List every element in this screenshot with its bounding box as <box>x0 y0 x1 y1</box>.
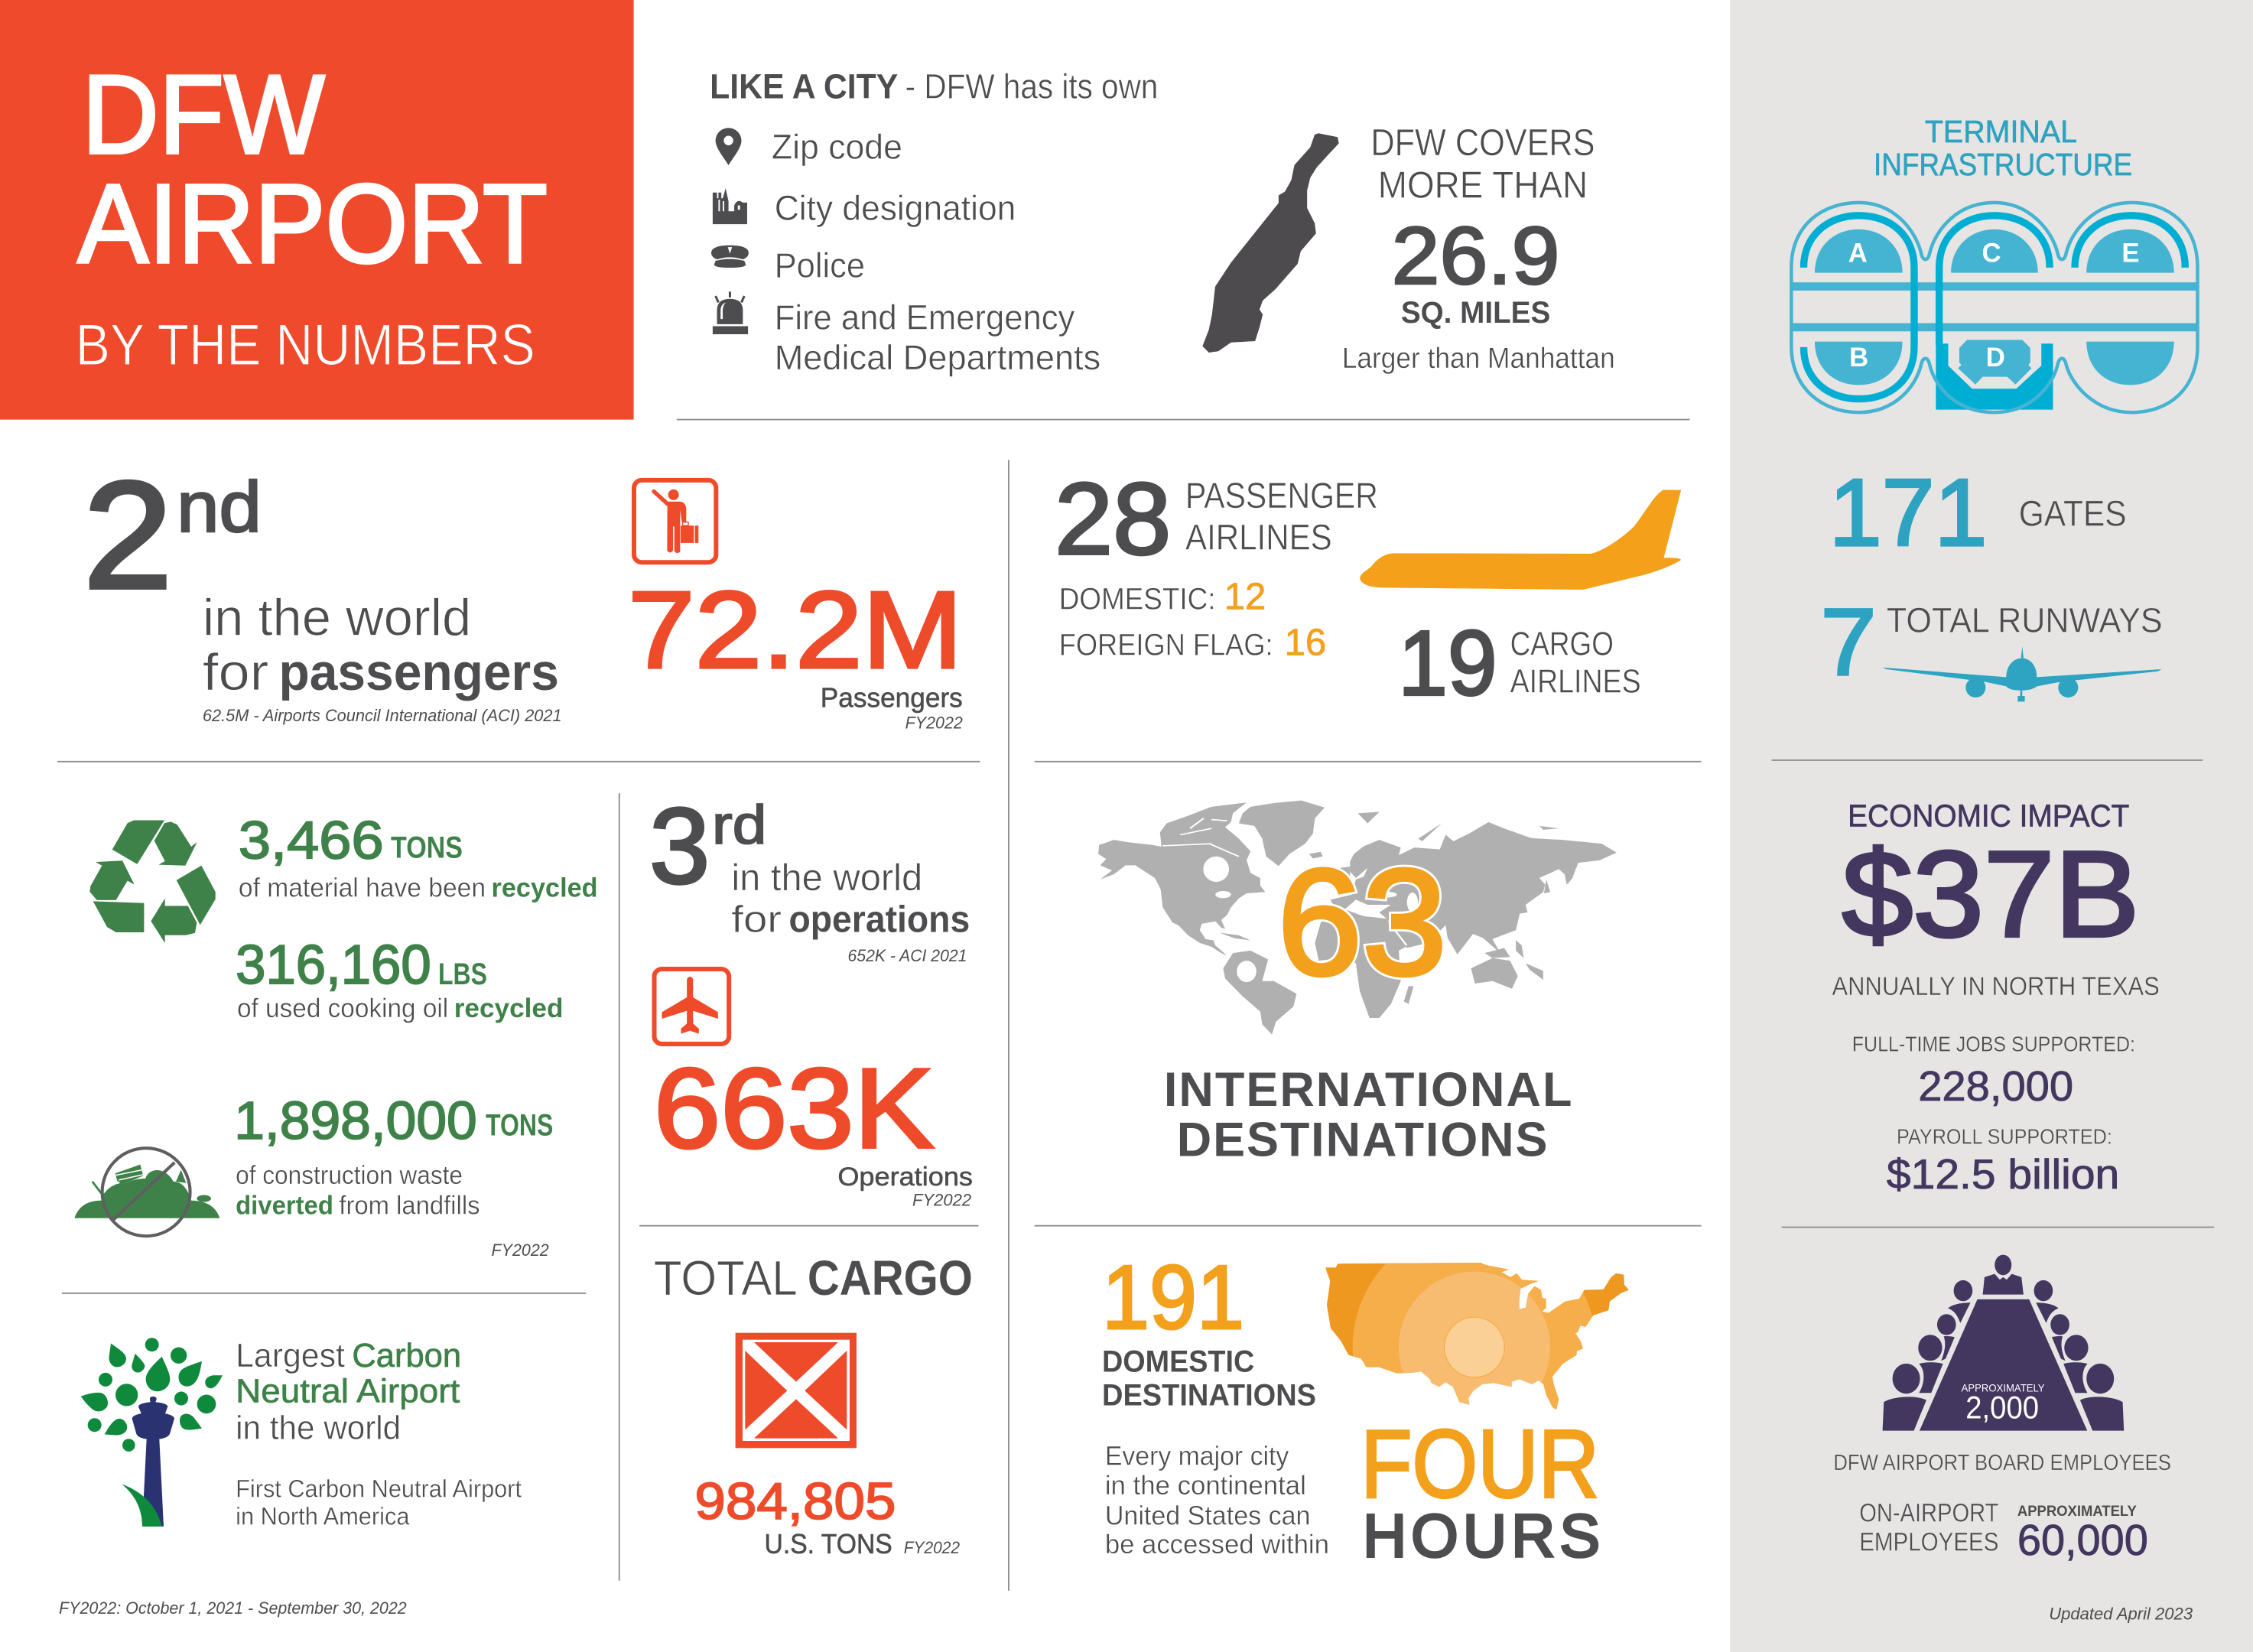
panel: airlines: 19 <box>1398 612 1497 714</box>
panel: total cargo: U.S. TONS <box>765 1529 892 1559</box>
panel: domestic destinations: in the continental <box>1105 1472 1306 1501</box>
panel: airlines: 16 <box>1285 623 1326 664</box>
in the world for passengers: for <box>203 644 268 701</box>
panel: terminal infrastructure: TERMINAL <box>1925 114 2077 149</box>
panel: terminal infrastructure: GATES <box>2019 493 2127 534</box>
panel: employees: 60,000 <box>2017 1516 2148 1564</box>
panel: title block <box>0 0 634 420</box>
panel: sustainability: from landfills <box>339 1192 480 1221</box>
panel: domestic destinations <box>1104 1262 1629 1559</box>
panel: sustainability: TONS <box>391 831 463 865</box>
panel: operations ranking <box>649 785 973 1209</box>
panel: employees: APPROXIMATELY <box>1962 1381 2045 1393</box>
panel: terminal infrastructure: INFRASTRUCTURE <box>1874 147 2132 182</box>
in the world for passengers: passengers <box>278 644 559 701</box>
63 international destinations: INTERNATIONAL <box>1164 1063 1572 1117</box>
panel: domestic destinations: Every major city <box>1105 1442 1289 1471</box>
panel: employees <box>1833 1255 2171 1564</box>
panel: domestic destinations: HOURS <box>1363 1502 1600 1569</box>
panel: employees: APPROXIMATELY <box>2017 1503 2137 1520</box>
panel: economic impact: 228,000 <box>1918 1063 2073 1110</box>
panel: operations ranking: FY2022 <box>912 1190 972 1209</box>
panel: airlines: AIRLINES <box>1510 664 1641 701</box>
63 international destinations <box>1164 837 1572 1167</box>
in the world for passengers <box>203 589 559 701</box>
panel: operations ranking: for <box>731 899 782 940</box>
panel: sustainability: of used cooking oil <box>237 994 448 1023</box>
panel: carbon neutral: Carbon <box>352 1338 461 1374</box>
diagram: terminals: B <box>1849 343 1868 372</box>
icon: orange airplane <box>1360 490 1681 590</box>
panel: airlines: PASSENGER <box>1185 475 1378 515</box>
icon: airplane badge <box>655 969 729 1044</box>
2nd <box>83 450 262 620</box>
panel: terminal infrastructure: 171 <box>1829 460 1987 566</box>
panel: sustainability: recycled <box>454 994 564 1023</box>
panel: terminal infrastructure <box>1791 114 2197 701</box>
panel: operations ranking: in the world <box>731 857 922 899</box>
panel: total cargo <box>654 1250 973 1559</box>
panel: sustainability: LBS <box>438 958 487 991</box>
icon: police cap <box>711 246 749 268</box>
police: Police <box>775 246 865 285</box>
icon: Manhattan silhouette <box>1202 133 1339 353</box>
subtitle: BY THE NUMBERS <box>76 313 535 378</box>
panel: economic impact: ECONOMIC IMPACT <box>1848 798 2129 833</box>
dfw covers stat <box>1342 122 1615 374</box>
icon: landfill prohibited <box>74 1148 219 1236</box>
panel: domestic destinations: be accessed within <box>1105 1530 1329 1559</box>
icon: cargo box <box>736 1333 857 1448</box>
diagram: terminals: D <box>1986 343 2005 372</box>
panel: passenger ranking: Passengers <box>821 682 963 713</box>
panel: domestic destinations: United States can <box>1105 1501 1310 1530</box>
63 international destinations: DESTINATIONS <box>1177 1114 1547 1167</box>
icon: location pin <box>716 128 741 165</box>
panel: operations ranking: 652K - ACI 2021 <box>848 946 967 965</box>
panel: employees: ON-AIRPORT <box>1859 1499 1998 1528</box>
panel: terminal infrastructure: 7 <box>1820 590 1877 695</box>
panel: carbon neutral: Neutral Airport <box>236 1374 460 1410</box>
fire and emergency: Fire and Emergency <box>775 298 1075 337</box>
panel: domestic destinations: DESTINATIONS <box>1102 1378 1316 1412</box>
icon: city skyline <box>713 188 747 224</box>
panel: sustainability: of material have been <box>239 873 486 902</box>
diagram: terminals: A <box>1848 239 1868 268</box>
zip code: Zip code <box>772 128 902 167</box>
update note: Updated April 2023 <box>2049 1604 2193 1623</box>
dfw covers stat: SQ. MILES <box>1401 296 1550 330</box>
in the world for passengers: in the world <box>203 589 471 646</box>
panel: right gray column <box>1730 0 2253 1652</box>
panel: operations ranking: rd <box>712 795 766 856</box>
panel: carbon neutral: First Carbon Neutral Airport <box>236 1475 522 1503</box>
panel: airlines: DOMESTIC: <box>1059 583 1215 616</box>
panel: operations ranking: Operations <box>837 1163 973 1192</box>
panel: airlines: CARGO <box>1510 626 1614 663</box>
icon: front-view airplane <box>1883 646 2162 701</box>
diagram: terminals: C <box>1982 239 2001 268</box>
panel: airlines: FOREIGN FLAG: <box>1059 629 1273 662</box>
panel: economic impact: FULL-TIME JOBS SUPPORTED: <box>1852 1031 2135 1055</box>
heading: like a city <box>710 67 1158 106</box>
panel: domestic destinations: DOMESTIC <box>1102 1345 1254 1378</box>
panel: airlines <box>1055 462 1681 714</box>
number 63: 63 <box>1277 837 1447 1006</box>
panel: sustainability <box>74 811 598 1260</box>
panel: total cargo: TOTAL <box>654 1250 798 1306</box>
panel: carbon neutral: in North America <box>236 1502 410 1530</box>
medical departments: Medical Departments <box>775 338 1100 377</box>
panel: airlines: 28 <box>1055 462 1171 576</box>
icon: tree and control tower <box>81 1338 223 1527</box>
panel: passenger ranking <box>83 450 963 733</box>
title: DFW: DFW <box>82 52 325 177</box>
panel: economic impact: $37B <box>1842 825 2140 962</box>
panel: sustainability: recycled <box>492 873 598 902</box>
panel: sustainability: 3,466 <box>239 811 384 870</box>
map: continental US <box>1325 1262 1629 1410</box>
panel: employees: DFW AIRPORT BOARD EMPLOYEES <box>1833 1451 2171 1475</box>
panel: economic impact: ANNUALLY IN NORTH TEXAS <box>1832 972 2160 1001</box>
panel: sustainability: of construction waste <box>236 1161 463 1190</box>
panel: airlines: AIRLINES <box>1185 517 1332 558</box>
panel: employees: EMPLOYEES <box>1859 1527 1998 1556</box>
footnote: FY2022: October 1, 2021 - September 30, 2022 <box>59 1598 407 1618</box>
panel: domestic destinations: 191 <box>1102 1247 1244 1348</box>
dfw covers stat: MORE THAN <box>1378 164 1588 206</box>
panel: economic impact: PAYROLL SUPPORTED: <box>1897 1124 2112 1149</box>
panel: total cargo: FY2022 <box>904 1538 960 1557</box>
2nd: nd <box>177 467 262 547</box>
panel: carbon neutral: in the world <box>236 1410 401 1447</box>
panel: domestic destinations: FOUR <box>1361 1410 1599 1518</box>
panel: employees: 2,000 <box>1965 1390 2039 1425</box>
title: AIRPORT: AIRPORT <box>77 161 548 287</box>
panel: like a city <box>710 67 1158 377</box>
heading: like a city: LIKE A CITY <box>710 67 898 106</box>
dfw covers stat: 26.9 <box>1392 210 1559 301</box>
panel: sustainability: 316,160 <box>236 935 431 996</box>
panel: carbon neutral <box>81 1338 522 1530</box>
panel: sustainability: FY2022 <box>492 1241 549 1260</box>
panel: sustainability: diverted <box>236 1192 333 1221</box>
panel: economic impact <box>1832 798 2160 1198</box>
dfw covers stat: Larger than Manhattan <box>1342 342 1615 374</box>
number 63: 63 <box>1277 837 1447 1006</box>
panel: operations ranking: 3 <box>649 785 710 906</box>
2nd: 2 <box>83 450 172 620</box>
icon: passenger <box>634 480 716 562</box>
world map <box>1098 801 1617 1035</box>
icon: emergency beacon <box>713 291 748 334</box>
diagram: terminals <box>1791 203 2197 412</box>
panel: airlines: 12 <box>1224 577 1266 618</box>
panel: operations ranking: operations <box>788 899 970 940</box>
icon: recycling arrows <box>89 820 216 943</box>
panel: passenger ranking: FY2022 <box>905 714 963 733</box>
icon: boardroom table <box>1883 1255 2124 1431</box>
panel: sustainability: TONS <box>486 1108 553 1142</box>
dfw covers stat: DFW COVERS <box>1370 122 1595 164</box>
panel: sustainability: 1,898,000 <box>234 1091 477 1150</box>
panel: total cargo: 984,805 <box>694 1473 896 1530</box>
heading: like a city: - DFW has its own <box>905 67 1158 106</box>
diagram: terminals: E <box>2121 239 2140 268</box>
72.2M passengers: 72.2M <box>628 570 963 691</box>
panel: economic impact: $12.5 billion <box>1887 1151 2119 1198</box>
panel: operations ranking: 663K <box>654 1046 934 1172</box>
ACI note: 62.5M - Airports Council International (ACI) 2021 <box>203 706 562 725</box>
panel: terminal infrastructure: TOTAL RUNWAYS <box>1887 601 2163 640</box>
panel: carbon neutral: Largest <box>236 1338 345 1374</box>
city designation: City designation <box>775 188 1016 227</box>
panel: total cargo: CARGO <box>808 1250 973 1306</box>
